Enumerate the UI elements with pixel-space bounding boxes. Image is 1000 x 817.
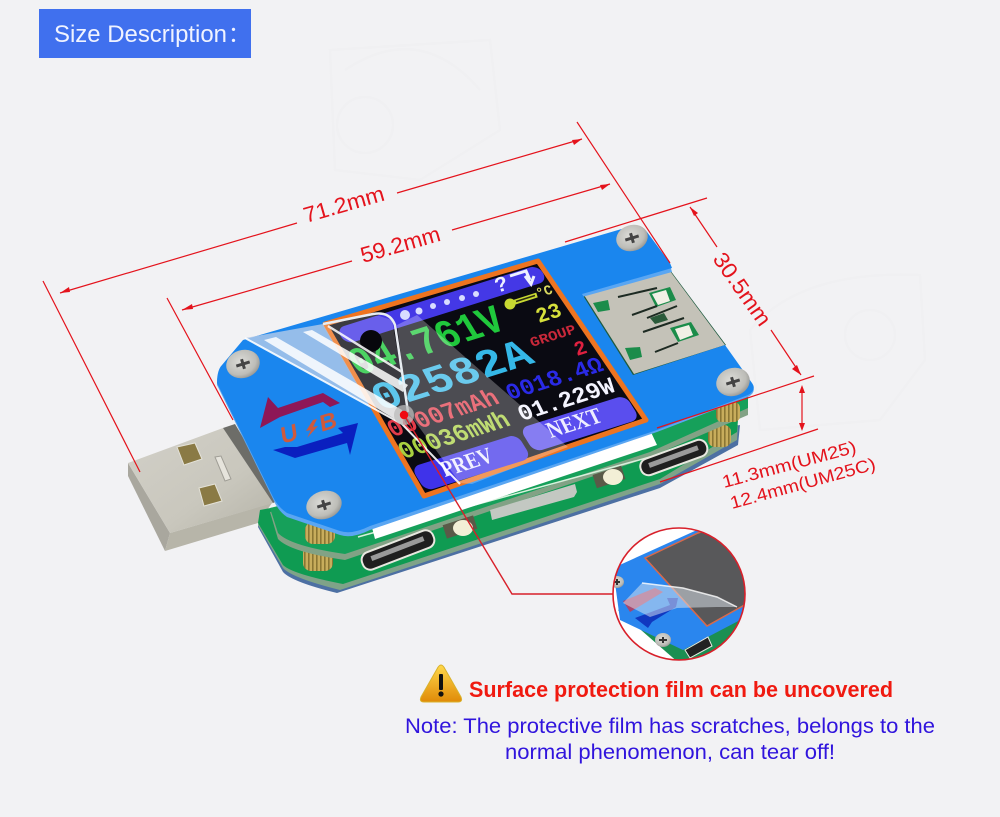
leader line to inset	[394, 405, 613, 594]
usb letter b: B	[318, 408, 338, 438]
heading: size description: Size Description	[54, 21, 227, 48]
film over plate	[245, 324, 370, 406]
temperature value: 23	[533, 299, 566, 330]
prev button: PREV	[436, 443, 498, 482]
device: USB meter	[128, 221, 754, 593]
dimension: height	[657, 376, 878, 513]
inset film highlight	[642, 583, 737, 607]
film light band wide	[264, 337, 403, 424]
inset arrows	[623, 588, 663, 612]
dimension: 59.2mm	[182, 184, 610, 310]
status dots	[400, 291, 479, 320]
return arrow icon	[510, 271, 534, 284]
blue arrow	[273, 423, 358, 458]
upper pcb	[270, 390, 748, 560]
tactile button left	[443, 515, 477, 539]
next button: NEXT	[542, 403, 606, 443]
usb logo arrows	[260, 393, 358, 458]
heading: size description	[39, 9, 251, 58]
thermometer icon	[504, 295, 537, 310]
dimension: 59.2mm: 59.2mm	[357, 221, 443, 268]
height label um25c: 12.4mm(UM25C)	[728, 454, 878, 513]
brass standoff upper left	[305, 522, 335, 544]
usb-c port right	[638, 438, 710, 477]
group label: GROUP	[528, 323, 579, 352]
group value: 2	[571, 337, 591, 363]
status bar	[336, 265, 548, 344]
inset: film detail circle	[612, 527, 746, 661]
watermark: lower stamp	[750, 275, 925, 430]
dimension: 71.2mm	[60, 139, 582, 293]
usb letter u: U	[279, 420, 299, 450]
inset blue plate	[616, 530, 743, 650]
heading: size description: ：	[228, 22, 250, 47]
brass standoff upper right	[716, 402, 740, 422]
film lower edge	[245, 338, 460, 484]
dimension: 30.5mm	[565, 198, 801, 375]
film light band middle	[303, 330, 408, 392]
screw top right	[613, 221, 651, 255]
top plate rim	[217, 228, 754, 536]
film light band thin	[328, 326, 402, 372]
inset pcb	[618, 610, 738, 660]
fpc slot	[490, 484, 577, 520]
prev button	[411, 434, 532, 491]
dark spot seen through the film	[360, 330, 382, 352]
witness lines: length	[43, 122, 670, 472]
film lobe over screen	[323, 314, 408, 424]
brass standoff lower right	[708, 425, 731, 447]
icon: warning triangle	[420, 665, 462, 702]
inset screws	[655, 633, 671, 647]
white strip	[370, 430, 657, 539]
note line 2: normal phenomenon, can tear off!	[505, 741, 835, 764]
watermark: upper stamp	[330, 40, 500, 180]
top plate	[217, 226, 754, 532]
screen bezel	[325, 261, 646, 496]
screw top left	[223, 346, 263, 382]
film shading over the screen	[397, 315, 568, 484]
inset film	[623, 583, 737, 617]
brass standoff lower left	[303, 545, 333, 571]
inset screw left	[614, 576, 624, 588]
next button	[519, 395, 640, 452]
screw bottom right	[713, 364, 753, 400]
warning heading: Surface protection film can be uncovered	[469, 677, 893, 702]
protective film, peeled	[245, 313, 568, 484]
capacity mAh: 00007mAh	[382, 386, 505, 444]
height label um25: 11.3mm(UM25)	[720, 437, 858, 492]
inset screen	[644, 532, 744, 627]
energy mWh: 00036mWh	[393, 408, 516, 466]
usb plug	[128, 424, 280, 551]
usb-c port left	[359, 528, 437, 572]
usb socket	[581, 270, 726, 377]
note line 1: Note: The protective film has scratches, belongs to the	[405, 715, 935, 738]
voltage: 04.761V	[340, 300, 516, 388]
screw bottom left	[303, 486, 345, 524]
lower pcb	[258, 420, 740, 593]
dimension: 71.2mm: 71.2mm	[300, 181, 387, 228]
temperature unit: °C	[534, 283, 555, 303]
film curl outline	[323, 313, 408, 412]
inset usb-c	[685, 637, 712, 658]
dimension: 30.5mm: 30.5mm	[708, 248, 777, 331]
resistance: 0018.4Ω	[501, 352, 609, 406]
bolt icon	[306, 419, 318, 438]
power: 01.229W	[513, 373, 621, 427]
current: 02582A	[363, 333, 544, 423]
red arrow	[260, 393, 340, 428]
lcd screen content	[336, 265, 640, 491]
status icons: ?	[492, 272, 511, 298]
tactile button right	[593, 466, 625, 488]
